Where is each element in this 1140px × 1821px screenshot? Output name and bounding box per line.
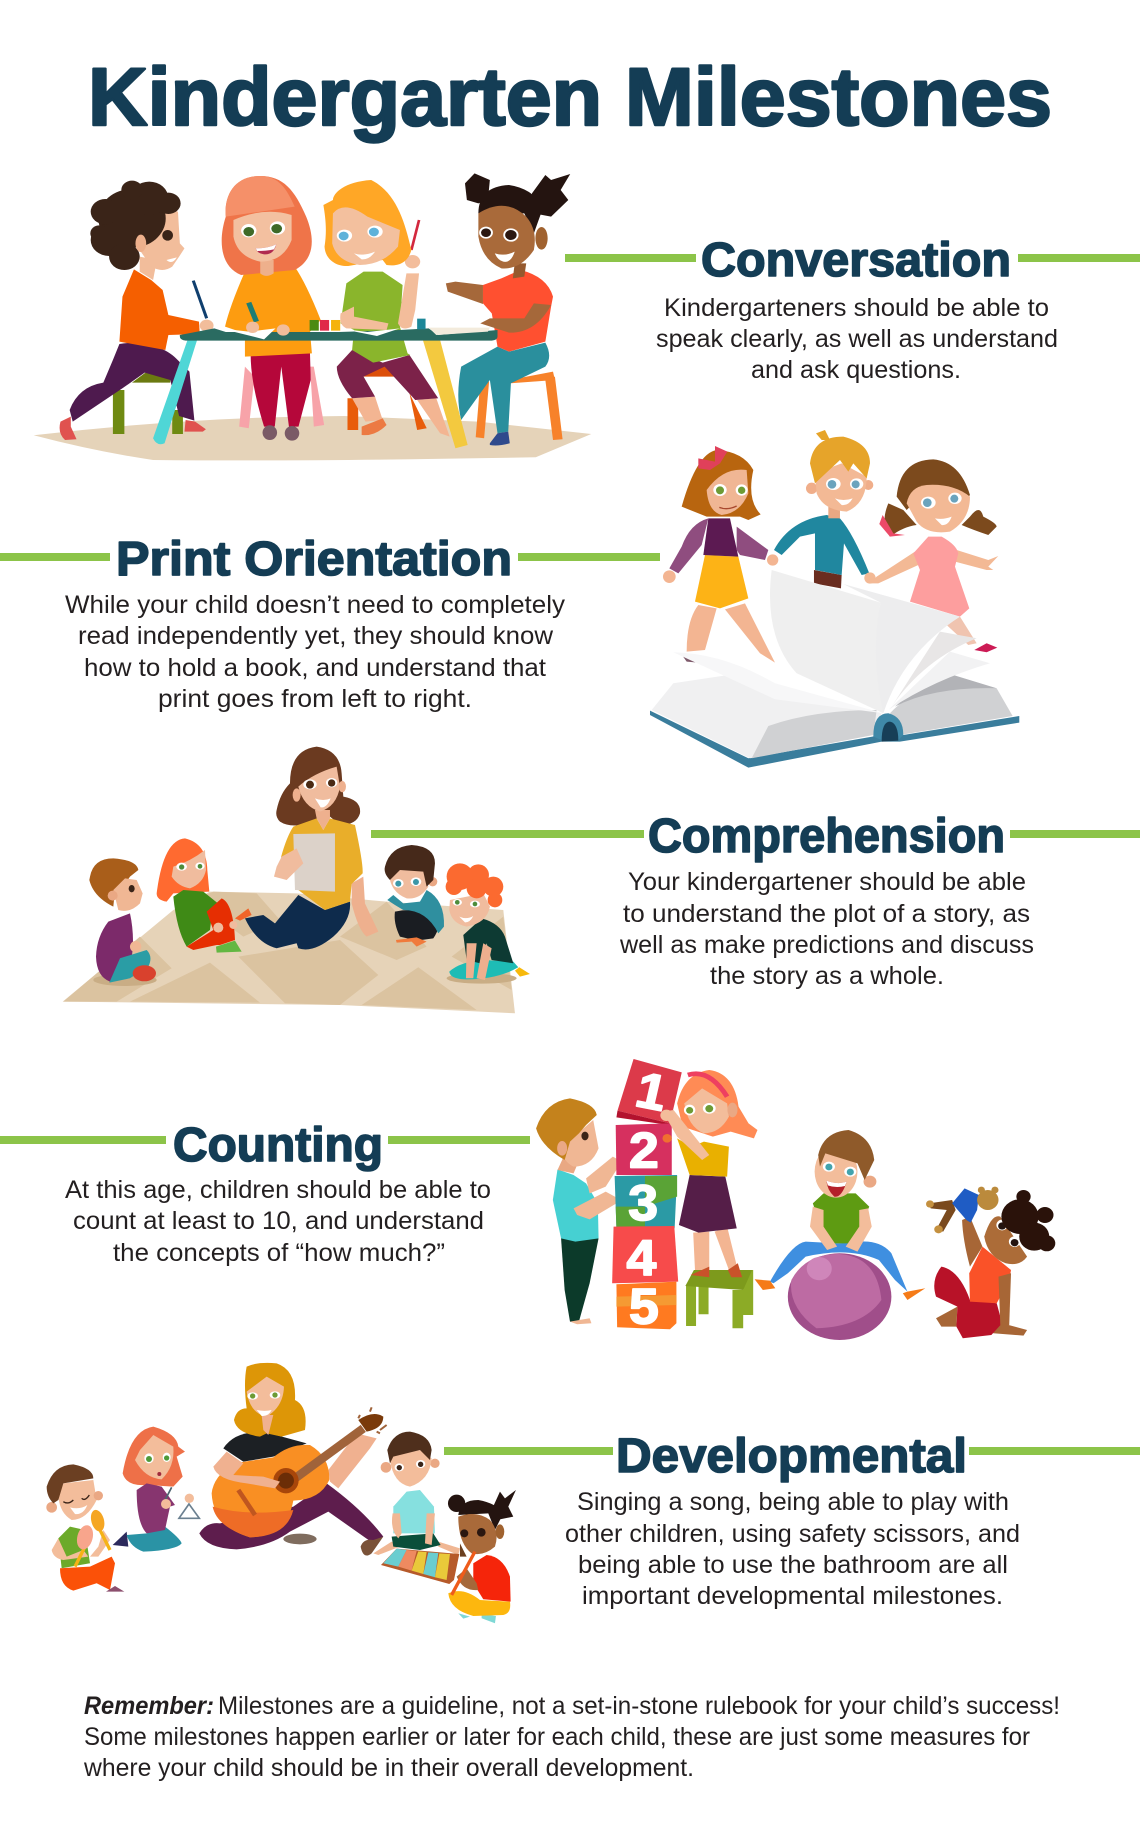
boy with blond hair	[774, 430, 876, 588]
body text	[656, 294, 1058, 384]
connector bars	[565, 254, 1140, 262]
stack of numbered blocks: 1	[631, 1061, 673, 1122]
heading: Print Orientation	[116, 533, 512, 586]
body text: important developmental milestones.	[582, 1582, 1003, 1610]
heading: Conversation	[701, 234, 1011, 287]
callout: remember note: Remember:	[84, 1692, 214, 1720]
callout: remember note	[83, 1692, 1060, 1782]
heading: Comprehension	[648, 810, 1005, 863]
teacher reading paper	[245, 747, 378, 949]
boy with red curls	[446, 863, 530, 984]
child with blond hair	[323, 180, 450, 437]
boy at blocks	[536, 1098, 622, 1324]
heading: Developmental	[616, 1430, 967, 1483]
body text: the concepts of “how much?”	[113, 1239, 445, 1267]
body text: and ask questions.	[751, 356, 961, 384]
body text	[565, 1488, 1020, 1610]
body text: count at least to 10, and understand	[73, 1207, 484, 1235]
stack of numbered blocks: 4	[627, 1230, 657, 1286]
body text: being able to use the bathroom are all	[578, 1551, 1008, 1579]
title: Kindergarten Milestones	[88, 52, 1052, 143]
body text: read independently yet, they should know	[78, 622, 554, 650]
body text: At this age, children should be able to	[65, 1176, 491, 1204]
stack of numbered blocks: 2	[629, 1122, 659, 1178]
body text: well as make predictions and discuss	[619, 931, 1034, 959]
illustration: children talking around a table	[34, 173, 591, 460]
body text	[619, 868, 1034, 990]
connector bars	[0, 553, 660, 561]
body text: print goes from left to right.	[158, 685, 472, 713]
panel: comprehension	[371, 810, 1140, 990]
child with curly hair	[60, 181, 214, 440]
callout: remember note: Milestones are a guideline, not a set-in-stone rulebook for your child’s success!	[218, 1692, 1060, 1720]
girl in green	[157, 838, 252, 953]
callout: remember note: Some milestones happen earlier or later for each child, these are just some measures for	[84, 1723, 1030, 1751]
illustration: teacher reading to children on a rug	[63, 747, 530, 1013]
body text: how to hold a book, and understand that	[84, 654, 546, 682]
connector bars	[371, 830, 1140, 838]
girl with teddy bear	[926, 1187, 1055, 1338]
callout: remember note: where your child should be in their overall development.	[83, 1754, 694, 1782]
illustration: teacher with guitar and children with instruments	[46, 1363, 516, 1623]
illustration: children with number blocks and toys	[536, 1059, 1055, 1340]
body text: other children, using safety scissors, and	[565, 1520, 1020, 1548]
body text: Kindergarteners should be able to	[664, 294, 1049, 322]
child with dark pigtails	[446, 173, 570, 446]
stack of numbered blocks	[612, 1059, 682, 1334]
body text: the story as a whole.	[710, 962, 944, 990]
connector bars	[444, 1447, 1140, 1455]
teacher with guitar	[199, 1363, 387, 1556]
open book	[650, 570, 1019, 768]
body text: Your kindergartener should be able	[628, 868, 1026, 896]
body text: Singing a song, being able to play with	[577, 1488, 1009, 1516]
heading: Counting	[173, 1119, 383, 1172]
panel: print orientation	[0, 533, 660, 713]
body text: speak clearly, as well as understand	[656, 325, 1058, 353]
boy on exercise ball	[755, 1130, 925, 1340]
rug	[63, 892, 515, 1013]
body text	[65, 1176, 491, 1267]
girl with triangle	[113, 1427, 199, 1552]
floor rug	[34, 416, 591, 460]
boy with maracas	[46, 1464, 124, 1592]
boy with xylophone	[373, 1432, 460, 1584]
stack of numbered blocks: 5	[629, 1278, 659, 1334]
panel: developmental	[444, 1430, 1140, 1610]
panel: counting	[0, 1119, 530, 1267]
girl with flute	[448, 1490, 516, 1623]
child with coral hair	[222, 176, 324, 441]
boy hugging knees	[385, 845, 444, 947]
boy in purple	[89, 858, 157, 986]
body text: to understand the plot of a story, as	[623, 900, 1030, 928]
body text: While your child doesn’t need to completely	[65, 591, 566, 619]
body text	[65, 591, 566, 713]
illustration: children walking on an open book	[650, 430, 1019, 768]
stack of numbered blocks: 3	[628, 1175, 658, 1231]
table with paper and paints	[153, 319, 498, 448]
panel: conversation	[565, 234, 1140, 384]
girl with bow	[663, 446, 778, 663]
girl on stool	[660, 1070, 757, 1328]
girl in pink dress	[870, 459, 998, 652]
connector bars	[0, 1136, 530, 1144]
